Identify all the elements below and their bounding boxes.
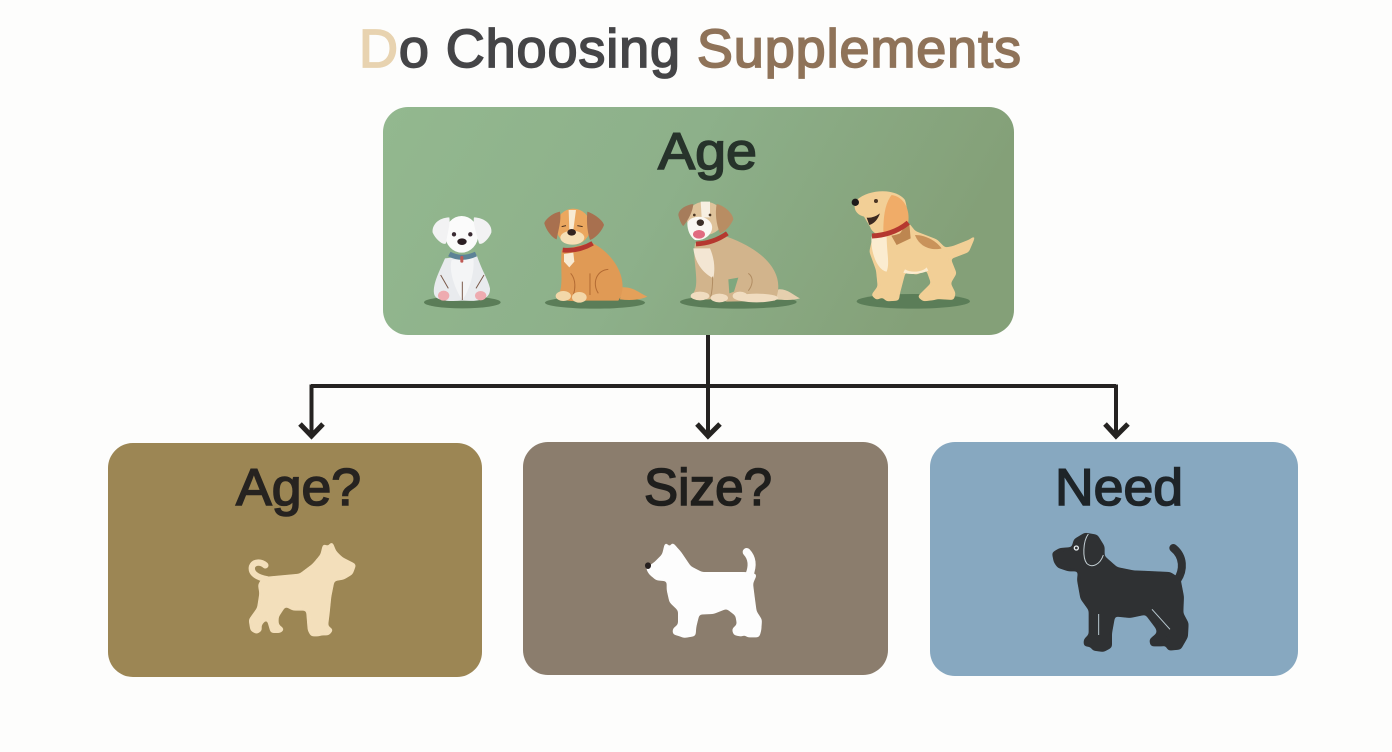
icon: orange dog: [544, 209, 647, 309]
panel: size question: [523, 442, 888, 675]
panel: age question: [108, 443, 482, 677]
title: Do Choosing Supplements: [359, 19, 1021, 79]
heading: Need: Need: [1055, 459, 1183, 517]
panel: need: [930, 442, 1298, 676]
icon: white puppy: [424, 216, 501, 308]
panel: age top: [383, 107, 1014, 335]
connector arrows: [300, 335, 1128, 436]
heading: Age?: Age?: [236, 459, 361, 517]
icon: cream dog silhouette: [250, 543, 355, 635]
icon: black dog silhouette: [1053, 534, 1187, 651]
icon: golden dog: [852, 191, 975, 309]
icon: tan dog: [678, 202, 800, 309]
heading: Age: Age: [658, 123, 757, 181]
icon: white dog silhouette: [645, 544, 761, 637]
heading: Size?: Size?: [644, 459, 772, 517]
